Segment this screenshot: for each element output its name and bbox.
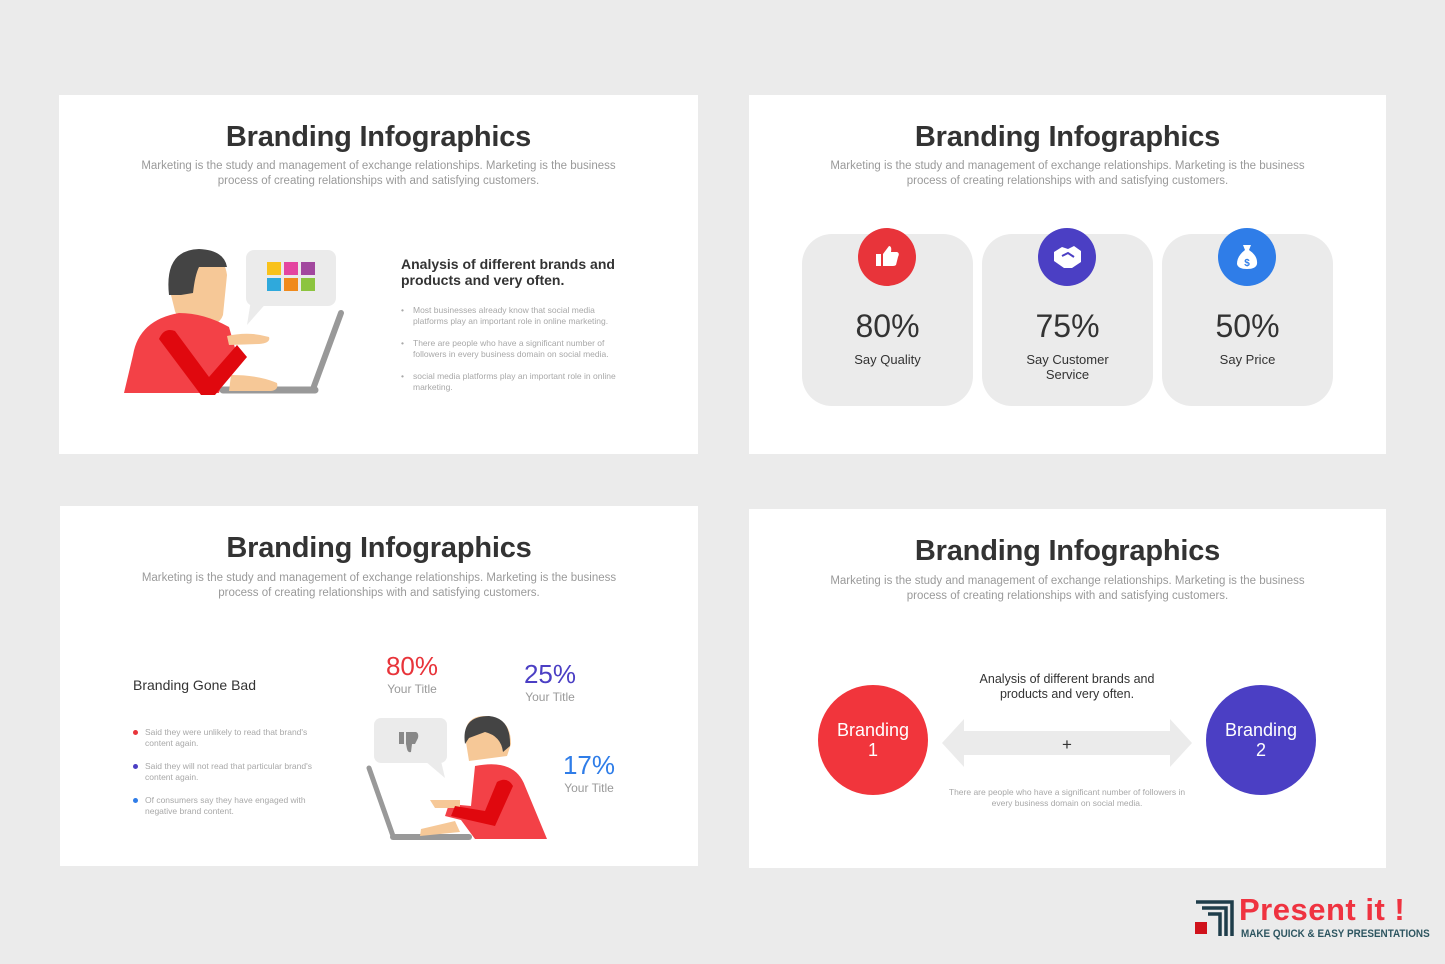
title: Branding Infographics bbox=[915, 535, 1220, 567]
subtitle: process of creating relationships with and satisfying customers. bbox=[907, 590, 1228, 602]
circle: branding 1: 1 bbox=[868, 740, 878, 760]
icon: handshake bbox=[1038, 228, 1096, 286]
card: quality bbox=[802, 234, 973, 406]
icon: money bag bbox=[1218, 228, 1276, 286]
circle: branding 1 bbox=[818, 685, 928, 795]
logo: Present it: MAKE QUICK & EASY PRESENTATIONS bbox=[1241, 928, 1430, 940]
illustration: person at laptop bbox=[124, 249, 344, 395]
subtitle: Marketing is the study and management of exchange relationships. Marketing is the business bbox=[141, 160, 616, 172]
card: quality: Say Quality bbox=[854, 352, 921, 367]
subtitle: Marketing is the study and management of exchange relationships. Marketing is the business bbox=[142, 572, 616, 584]
card: quality: 80% bbox=[855, 308, 920, 344]
card: customer service: Service bbox=[1046, 367, 1089, 382]
bullet list: Of consumers say they have engaged with negative brand content. bbox=[145, 795, 306, 816]
bullet list: • bbox=[401, 371, 404, 381]
bullet list bbox=[401, 305, 616, 392]
title: Branding Infographics bbox=[226, 532, 532, 564]
heading: branding gone bad: Branding Gone Bad bbox=[133, 677, 256, 693]
stat: 25% bbox=[524, 659, 576, 704]
subtitle bbox=[830, 160, 1305, 186]
stat: 80%: 80% bbox=[386, 651, 438, 681]
logo: Present it bbox=[1195, 892, 1430, 940]
stat: 25%: 25% bbox=[524, 659, 576, 689]
circle: branding 2: 2 bbox=[1256, 740, 1266, 760]
caption: There are people who have a significant number of followers in every business domain on social media. bbox=[949, 787, 1185, 808]
subtitle: Marketing is the study and management of exchange relationships. Marketing is the business bbox=[830, 160, 1305, 172]
circle: branding 2 bbox=[1206, 685, 1316, 795]
stat: 17%: 17% bbox=[563, 750, 615, 780]
panel: bottom-left branding gone bad bbox=[60, 506, 698, 866]
subtitle bbox=[830, 575, 1305, 602]
heading: analysis: products and very often. bbox=[1000, 687, 1134, 701]
stat: 80% bbox=[386, 651, 438, 696]
stat: 25%: Your Title bbox=[525, 690, 575, 704]
subtitle: Marketing is the study and management of exchange relationships. Marketing is the business bbox=[830, 575, 1305, 587]
stat: 17% bbox=[563, 750, 615, 795]
card: customer service bbox=[982, 234, 1153, 406]
subtitle bbox=[141, 160, 616, 186]
card: price bbox=[1162, 234, 1333, 406]
panel: top-right stats bbox=[749, 95, 1386, 454]
bullet list: Said they will not read that particular brand's content again. bbox=[145, 761, 312, 782]
bullet list: Said they were unlikely to read that brand's content again. bbox=[145, 727, 307, 748]
card: customer service: 75% bbox=[1035, 308, 1100, 344]
stat: 17%: Your Title bbox=[564, 781, 614, 795]
bullet list: Most businesses already know that social media platforms play an important role in online marketing. bbox=[413, 305, 608, 326]
panel: top-left person analysis bbox=[59, 95, 698, 454]
bullet list: social media platforms play an important role in online marketing. bbox=[413, 371, 616, 392]
subtitle: process of creating relationships with and satisfying customers. bbox=[218, 174, 539, 186]
icon: money bag: $ bbox=[1244, 258, 1250, 269]
circle: branding 2: Branding bbox=[1225, 720, 1297, 740]
illustration: person with thumbs down bbox=[366, 716, 547, 840]
subtitle: process of creating relationships with and satisfying customers. bbox=[907, 174, 1228, 186]
bullet list: • bbox=[401, 338, 404, 348]
bullet list: There are people who have a significant number of followers in every business domain on social media. bbox=[413, 338, 609, 359]
icon: thumbs up bbox=[858, 228, 916, 286]
heading: analysis: products and very often. bbox=[401, 272, 564, 288]
stat: 80%: Your Title bbox=[387, 682, 437, 696]
panel: bottom-right branding comparison bbox=[749, 509, 1386, 868]
subtitle bbox=[142, 572, 616, 598]
circle: branding 1: Branding bbox=[837, 720, 909, 740]
subtitle: process of creating relationships with and satisfying customers. bbox=[218, 586, 540, 598]
logo: Present it: Present it ! bbox=[1239, 892, 1405, 927]
bullet list: • bbox=[401, 305, 404, 315]
bullet list bbox=[133, 727, 312, 816]
arrow: double-headed with plus: + bbox=[1062, 735, 1072, 754]
heading: analysis bbox=[401, 256, 615, 288]
heading: analysis: Analysis of different brands and bbox=[401, 256, 615, 272]
title: Branding Infographics bbox=[915, 121, 1220, 153]
title: Branding Infographics bbox=[226, 121, 531, 153]
arrow: double-headed with plus bbox=[942, 719, 1192, 767]
card: price: 50% bbox=[1215, 308, 1280, 344]
card: price: Say Price bbox=[1220, 352, 1275, 367]
heading: analysis: Analysis of different brands and bbox=[980, 672, 1154, 686]
heading: analysis bbox=[980, 672, 1154, 701]
card: customer service: Say Customer bbox=[1026, 352, 1109, 367]
